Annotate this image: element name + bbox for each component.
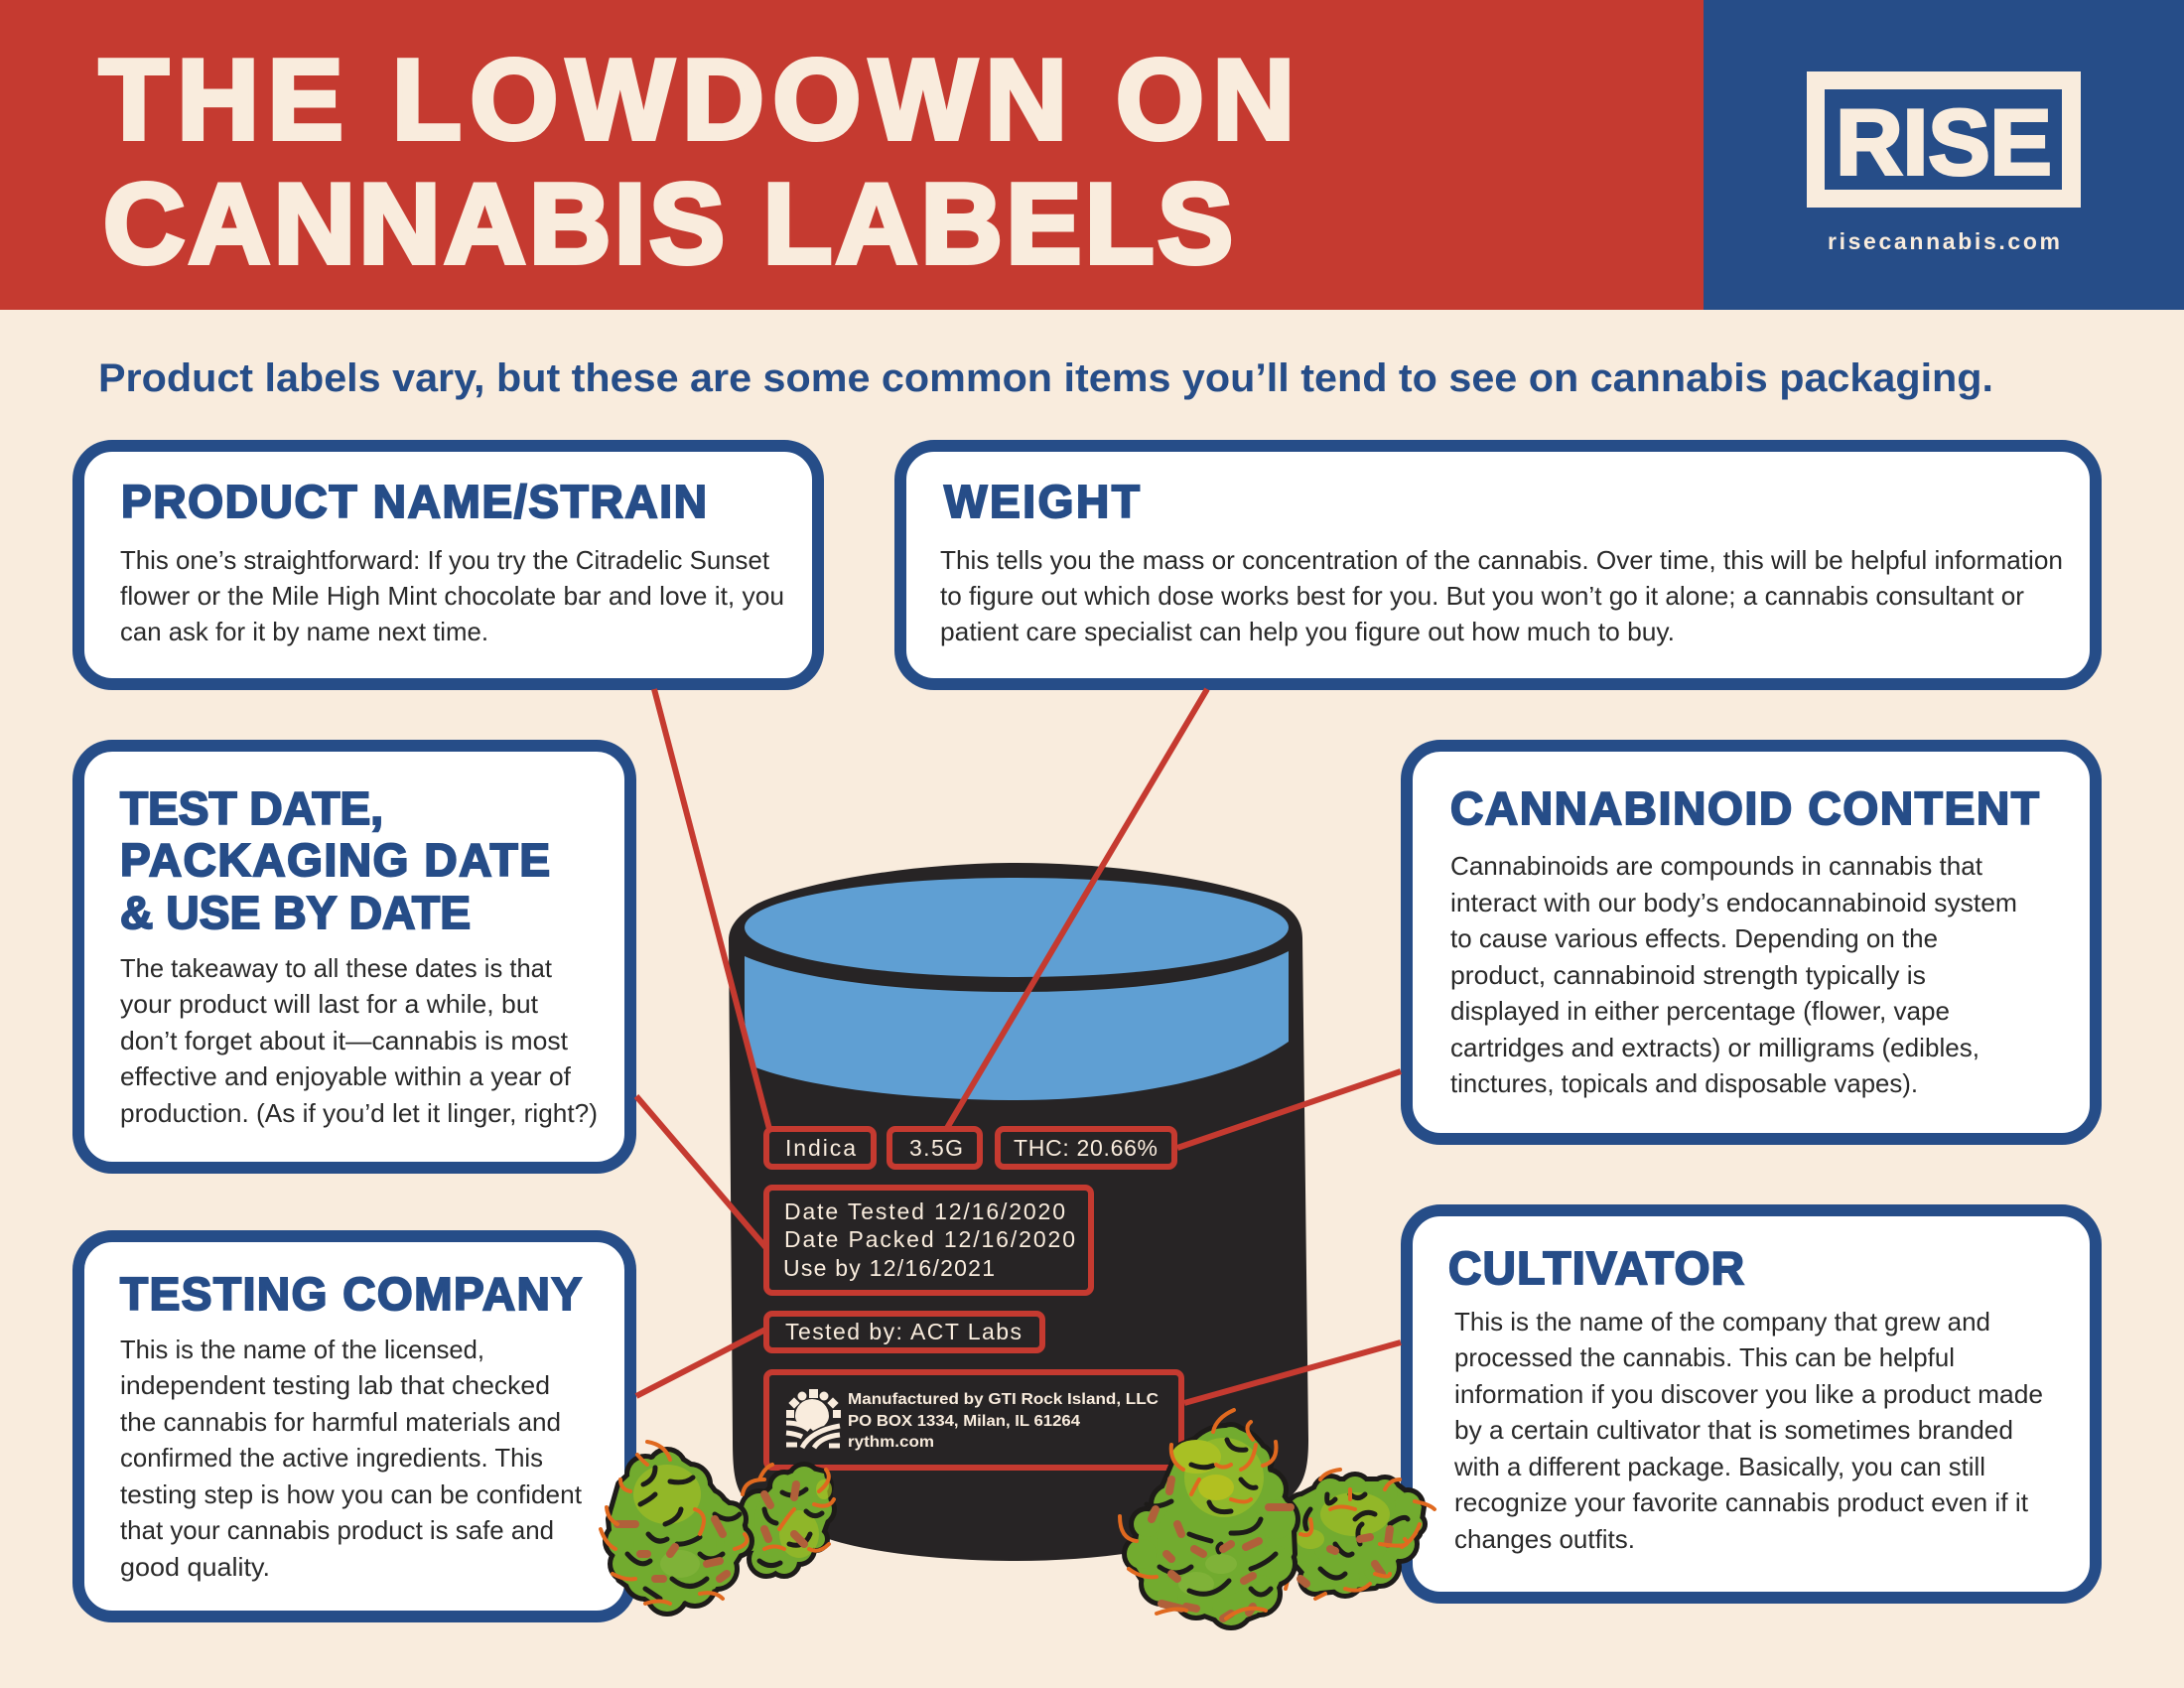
text: testing company body: testing step is how you can be confident [120, 1479, 583, 1509]
text: cannabinoid body: tinctures, topicals and disposable vapes). [1450, 1068, 1918, 1098]
text: product name body: This one’s straightforward: If you try the Citradelic Sunset [120, 545, 770, 575]
logo: RISE: risecannabis.com [1828, 228, 2060, 254]
panel: test date, packaging date and use by date [78, 746, 630, 1168]
heading: dates [120, 782, 550, 938]
text: weight body: to figure out which dose works best for you. But you won’t go it alone; a cannabis consultant or [940, 581, 2024, 611]
heading: weight: WEIGHT [944, 476, 1140, 527]
text: cultivator body: information if you discover you like a product made [1454, 1379, 2043, 1409]
jar illustration [729, 863, 1308, 1561]
text: weight body [940, 545, 2063, 646]
panel: weight [900, 446, 2096, 684]
panel: cultivator [1407, 1210, 2096, 1598]
label box: manufacturer: rythm.com [848, 1434, 934, 1451]
text: dates body: your product will last for a while, but [120, 989, 539, 1019]
header banner [0, 0, 2184, 310]
text: dates body [120, 953, 598, 1128]
text: cultivator body [1453, 1307, 2043, 1554]
text: testing company body [120, 1335, 583, 1582]
text: cultivator body: by a certain cultivator that is sometimes branded [1454, 1415, 2013, 1445]
illustration: cannabis buds left [601, 1442, 834, 1612]
text: cannabinoid body: Cannabinoids are compounds in cannabis that [1450, 851, 1983, 881]
text: dates body: don’t forget about it—cannabis is most [120, 1026, 569, 1055]
panel: product name / strain [78, 446, 818, 684]
label box: strain [766, 1129, 874, 1167]
text: testing company body: that your cannabis product is safe and [120, 1515, 554, 1545]
text: testing company body: confirmed the active ingredients. This [120, 1443, 543, 1473]
text: testing company body: This is the name of the licensed, [120, 1335, 484, 1364]
logo: RISE: RISE [1836, 89, 2052, 195]
text: product name body: flower or the Mile High Mint chocolate bar and love it, you [120, 581, 784, 611]
text: cultivator body: with a different package. Basically, you can still [1453, 1452, 1985, 1481]
text: cannabinoid body: cartridges and extracts) or milligrams (edibles, [1450, 1033, 1979, 1062]
panel: cannabinoid content [1407, 746, 2096, 1139]
illustration: cannabis buds right [1120, 1410, 1434, 1625]
title [99, 38, 1295, 288]
label box: weight [889, 1129, 980, 1167]
label box: strain: Indica [785, 1135, 856, 1161]
label box: dates: Date Tested 12/16/2020 [784, 1198, 1065, 1224]
text: cannabinoid body: displayed in either percentage (flower, vape [1450, 996, 1950, 1026]
text: product name body: can ask for it by name next time. [120, 617, 488, 646]
text: cultivator body: This is the name of the company that grew and [1454, 1307, 1990, 1336]
heading: product name: PRODUCT NAME/STRAIN [121, 476, 707, 527]
text: weight body: patient care specialist can help you figure out how much to buy. [940, 617, 1675, 646]
text: product name body [120, 545, 784, 646]
connector lines [636, 689, 1401, 1403]
subtitle: Product labels vary, but these are some common items you’ll tend to see on cannabis packaging. [98, 356, 1993, 400]
heading: dates: PACKAGING DATE [120, 834, 550, 886]
text: cultivator body: recognize your favorite cannabis product even if it [1454, 1487, 2029, 1517]
label box: tested by: Tested by: ACT Labs [785, 1319, 1022, 1344]
label box: THC: THC: 20.66% [1014, 1135, 1158, 1161]
text: dates body: The takeaway to all these dates is that [120, 953, 553, 983]
logo: RISE [1807, 71, 2081, 254]
title: THE LOWDOWN ON [99, 38, 1295, 163]
title: CANNABIS LABELS [103, 161, 1233, 288]
text: cannabinoid body: interact with our body’s endocannabinoid system [1450, 888, 2017, 917]
text: testing company body: independent testing lab that checked [120, 1370, 550, 1400]
label box: dates: Use by 12/16/2021 [783, 1255, 995, 1281]
heading: testing company: TESTING COMPANY [120, 1268, 582, 1320]
label box: manufacturer: Manufactured by GTI Rock Island, LLC [848, 1391, 1159, 1408]
text: testing company body: good quality. [120, 1552, 270, 1582]
label box: dates [766, 1188, 1091, 1293]
label box: weight: 3.5G [909, 1135, 963, 1161]
heading: cannabinoid content: CANNABINOID CONTENT [1450, 782, 2039, 834]
panel: testing company [78, 1236, 630, 1617]
text: dates body: production. (As if you’d let it linger, right?) [120, 1098, 598, 1128]
label box: manufacturer [766, 1372, 1181, 1468]
label box: THC [998, 1129, 1174, 1167]
label box: dates: Date Packed 12/16/2020 [784, 1226, 1075, 1252]
text: weight body: This tells you the mass or concentration of the cannabis. Over time, this will be helpful information [940, 545, 2063, 575]
icon: rising sun over fields [786, 1389, 841, 1448]
label box: tested by [766, 1314, 1042, 1350]
text: cannabinoid body: product, cannabinoid strength typically is [1450, 960, 1926, 990]
label box: manufacturer: PO BOX 1334, Milan, IL 61264 [848, 1413, 1080, 1430]
jar lid band [745, 951, 1289, 1100]
text: dates body: effective and enjoyable within a year of [120, 1061, 572, 1091]
jar lid top [745, 878, 1289, 977]
text: cultivator body: changes outfits. [1454, 1524, 1635, 1554]
text: testing company body: the cannabis for harmful materials and [120, 1407, 561, 1437]
heading: dates: TEST DATE, [120, 782, 383, 834]
text: cannabinoid body: to cause various effects. Depending on the [1450, 923, 1938, 953]
text: cannabinoid body [1450, 851, 2017, 1098]
text: cultivator body: processed the cannabis. This can be helpful [1454, 1342, 1955, 1372]
heading: dates: & USE BY DATE [120, 887, 471, 938]
heading: cultivator: CULTIVATOR [1448, 1242, 1744, 1294]
